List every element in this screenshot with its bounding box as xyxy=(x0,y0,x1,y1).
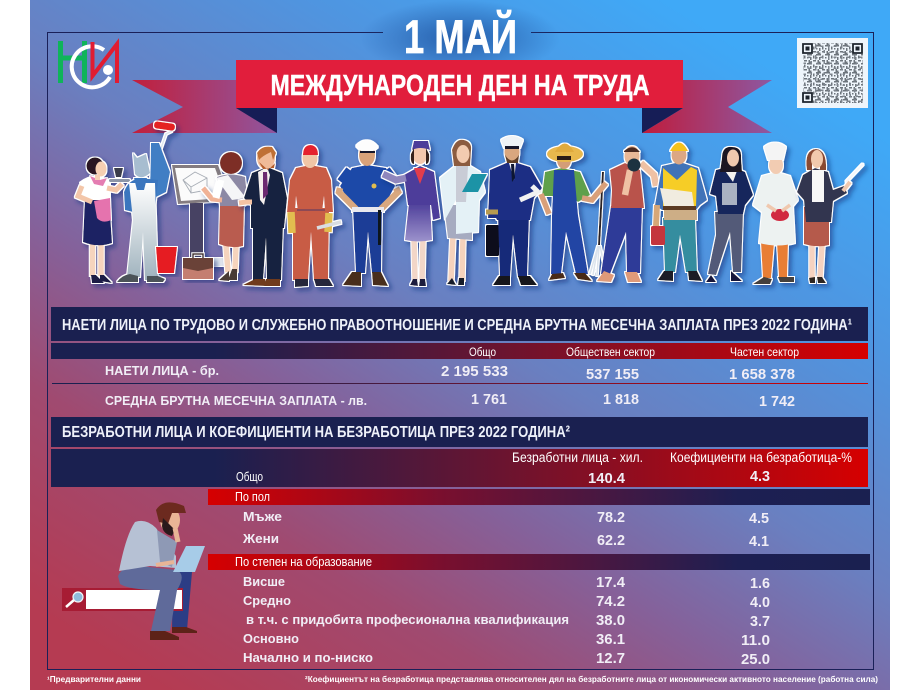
column header bar xyxy=(51,343,868,359)
table: unemployment xyxy=(51,449,870,668)
row: salary: СРЕДНА БРУТНА МЕСЕЧНА ЗАПЛАТА - лв. xyxy=(105,394,367,408)
title: 1 май xyxy=(360,0,560,76)
banner: МЕЖДУНАРОДЕН ДЕН НА ТРУДА xyxy=(270,70,650,102)
subheading: by education xyxy=(208,554,870,570)
logo xyxy=(60,41,117,87)
rows: by sex: 62.2 xyxy=(597,533,625,549)
footnote 1: ¹Предварителни данни xyxy=(47,675,141,684)
bucket xyxy=(156,247,177,273)
briefcase xyxy=(183,254,213,279)
header and total row: 140.4 xyxy=(588,471,625,487)
photographer xyxy=(597,146,656,282)
mechanic xyxy=(287,145,341,287)
easel xyxy=(172,165,231,266)
subheading: by education: По степен на образование xyxy=(235,555,372,569)
header and total row: Общо xyxy=(236,470,263,484)
rows: by education: Висше xyxy=(243,574,285,589)
row: salary xyxy=(105,392,795,410)
row: employed xyxy=(105,364,795,383)
rows: by sex: Мъже xyxy=(243,509,282,524)
icon: magnifier xyxy=(66,592,83,607)
waitress xyxy=(78,158,130,283)
rows: by education: 25.0 xyxy=(741,652,770,668)
row: employed: 1 658 378 xyxy=(729,367,795,383)
rows: by education: Средно xyxy=(243,593,291,608)
rows: by education: 11.0 xyxy=(741,633,770,649)
header and total row: 4.3 xyxy=(750,469,770,485)
title: 1 май: 1 МАЙ xyxy=(404,10,517,63)
rows: by sex: 4.5 xyxy=(749,511,769,527)
illustration: man with laptop xyxy=(118,502,205,640)
row: employed: НАЕТИ ЛИЦА - бр. xyxy=(105,364,219,378)
rows: by education: 74.2 xyxy=(596,594,625,610)
flight attendant xyxy=(383,141,440,286)
teacher with pointer xyxy=(797,149,863,283)
column header bar: Обществен сектор xyxy=(566,345,655,359)
column header bar: Общо xyxy=(469,345,496,359)
rows: by education: 1.6 xyxy=(750,576,770,592)
chef xyxy=(753,142,798,284)
office woman xyxy=(706,147,753,282)
row: salary: 1 742 xyxy=(759,394,795,410)
subheading: by sex: По пол xyxy=(235,490,270,504)
section heading: unemployed persons xyxy=(51,417,868,447)
row: salary: 1 761 xyxy=(471,392,507,408)
rows: by education xyxy=(243,574,770,668)
painter xyxy=(117,121,175,282)
row: employed: 537 155 xyxy=(586,367,639,383)
row: salary: 1 818 xyxy=(603,392,639,408)
woman at easel xyxy=(203,152,247,281)
farmer xyxy=(541,144,606,281)
search bar xyxy=(62,588,183,611)
section heading: unemployed persons: БЕЗРАБОТНИ ЛИЦА И КОЕФИЦИЕНТИ НА БЕЗРАБОТИЦА ПРЕЗ 2022 ГОДИНА² xyxy=(62,424,570,441)
illustration: row of workers xyxy=(78,121,863,287)
rows: by education: Основно xyxy=(243,631,299,646)
rows: by education: в т.ч. с придобита професионална квалификация xyxy=(246,612,569,627)
pilot xyxy=(486,136,542,285)
rows: by sex xyxy=(242,509,769,550)
rows: by education: Начално и по-ниско xyxy=(243,650,373,665)
subheading: by sex xyxy=(208,489,870,505)
businessman xyxy=(239,147,287,286)
column header bar: Частен сектор xyxy=(730,345,799,359)
left ribbon xyxy=(132,80,277,133)
footnote 2: ²Коефициентът на безработица представлява относителен дял на безработните лица от икономически активното население (работна сила) xyxy=(305,675,878,684)
rows: by education: 36.1 xyxy=(596,632,625,648)
rows: by education: 12.7 xyxy=(596,651,625,667)
rows: by sex: Жени xyxy=(242,531,279,546)
right ribbon xyxy=(642,80,772,133)
police officer xyxy=(339,140,398,286)
banner xyxy=(236,60,683,108)
construction worker xyxy=(651,142,707,281)
rows: by education: 38.0 xyxy=(596,613,625,629)
doctor xyxy=(440,140,487,285)
rows: by education: 3.7 xyxy=(750,614,770,630)
QR code xyxy=(797,38,868,108)
rows: by education: 4.0 xyxy=(750,595,770,611)
section heading: employed persons xyxy=(51,307,868,341)
rows: by sex: 78.2 xyxy=(597,510,625,526)
row: employed: 2 195 533 xyxy=(441,364,508,380)
man's far leg behind the search bar xyxy=(172,572,197,633)
header and total row: Безработни лица - хил. xyxy=(512,450,643,465)
rows: by education: 17.4 xyxy=(596,575,625,591)
rows: by sex: 4.1 xyxy=(749,534,769,550)
header and total row xyxy=(51,449,868,487)
table: employed persons and salary xyxy=(51,343,868,410)
header and total row: Коефициенти на безработица-% xyxy=(670,450,852,465)
